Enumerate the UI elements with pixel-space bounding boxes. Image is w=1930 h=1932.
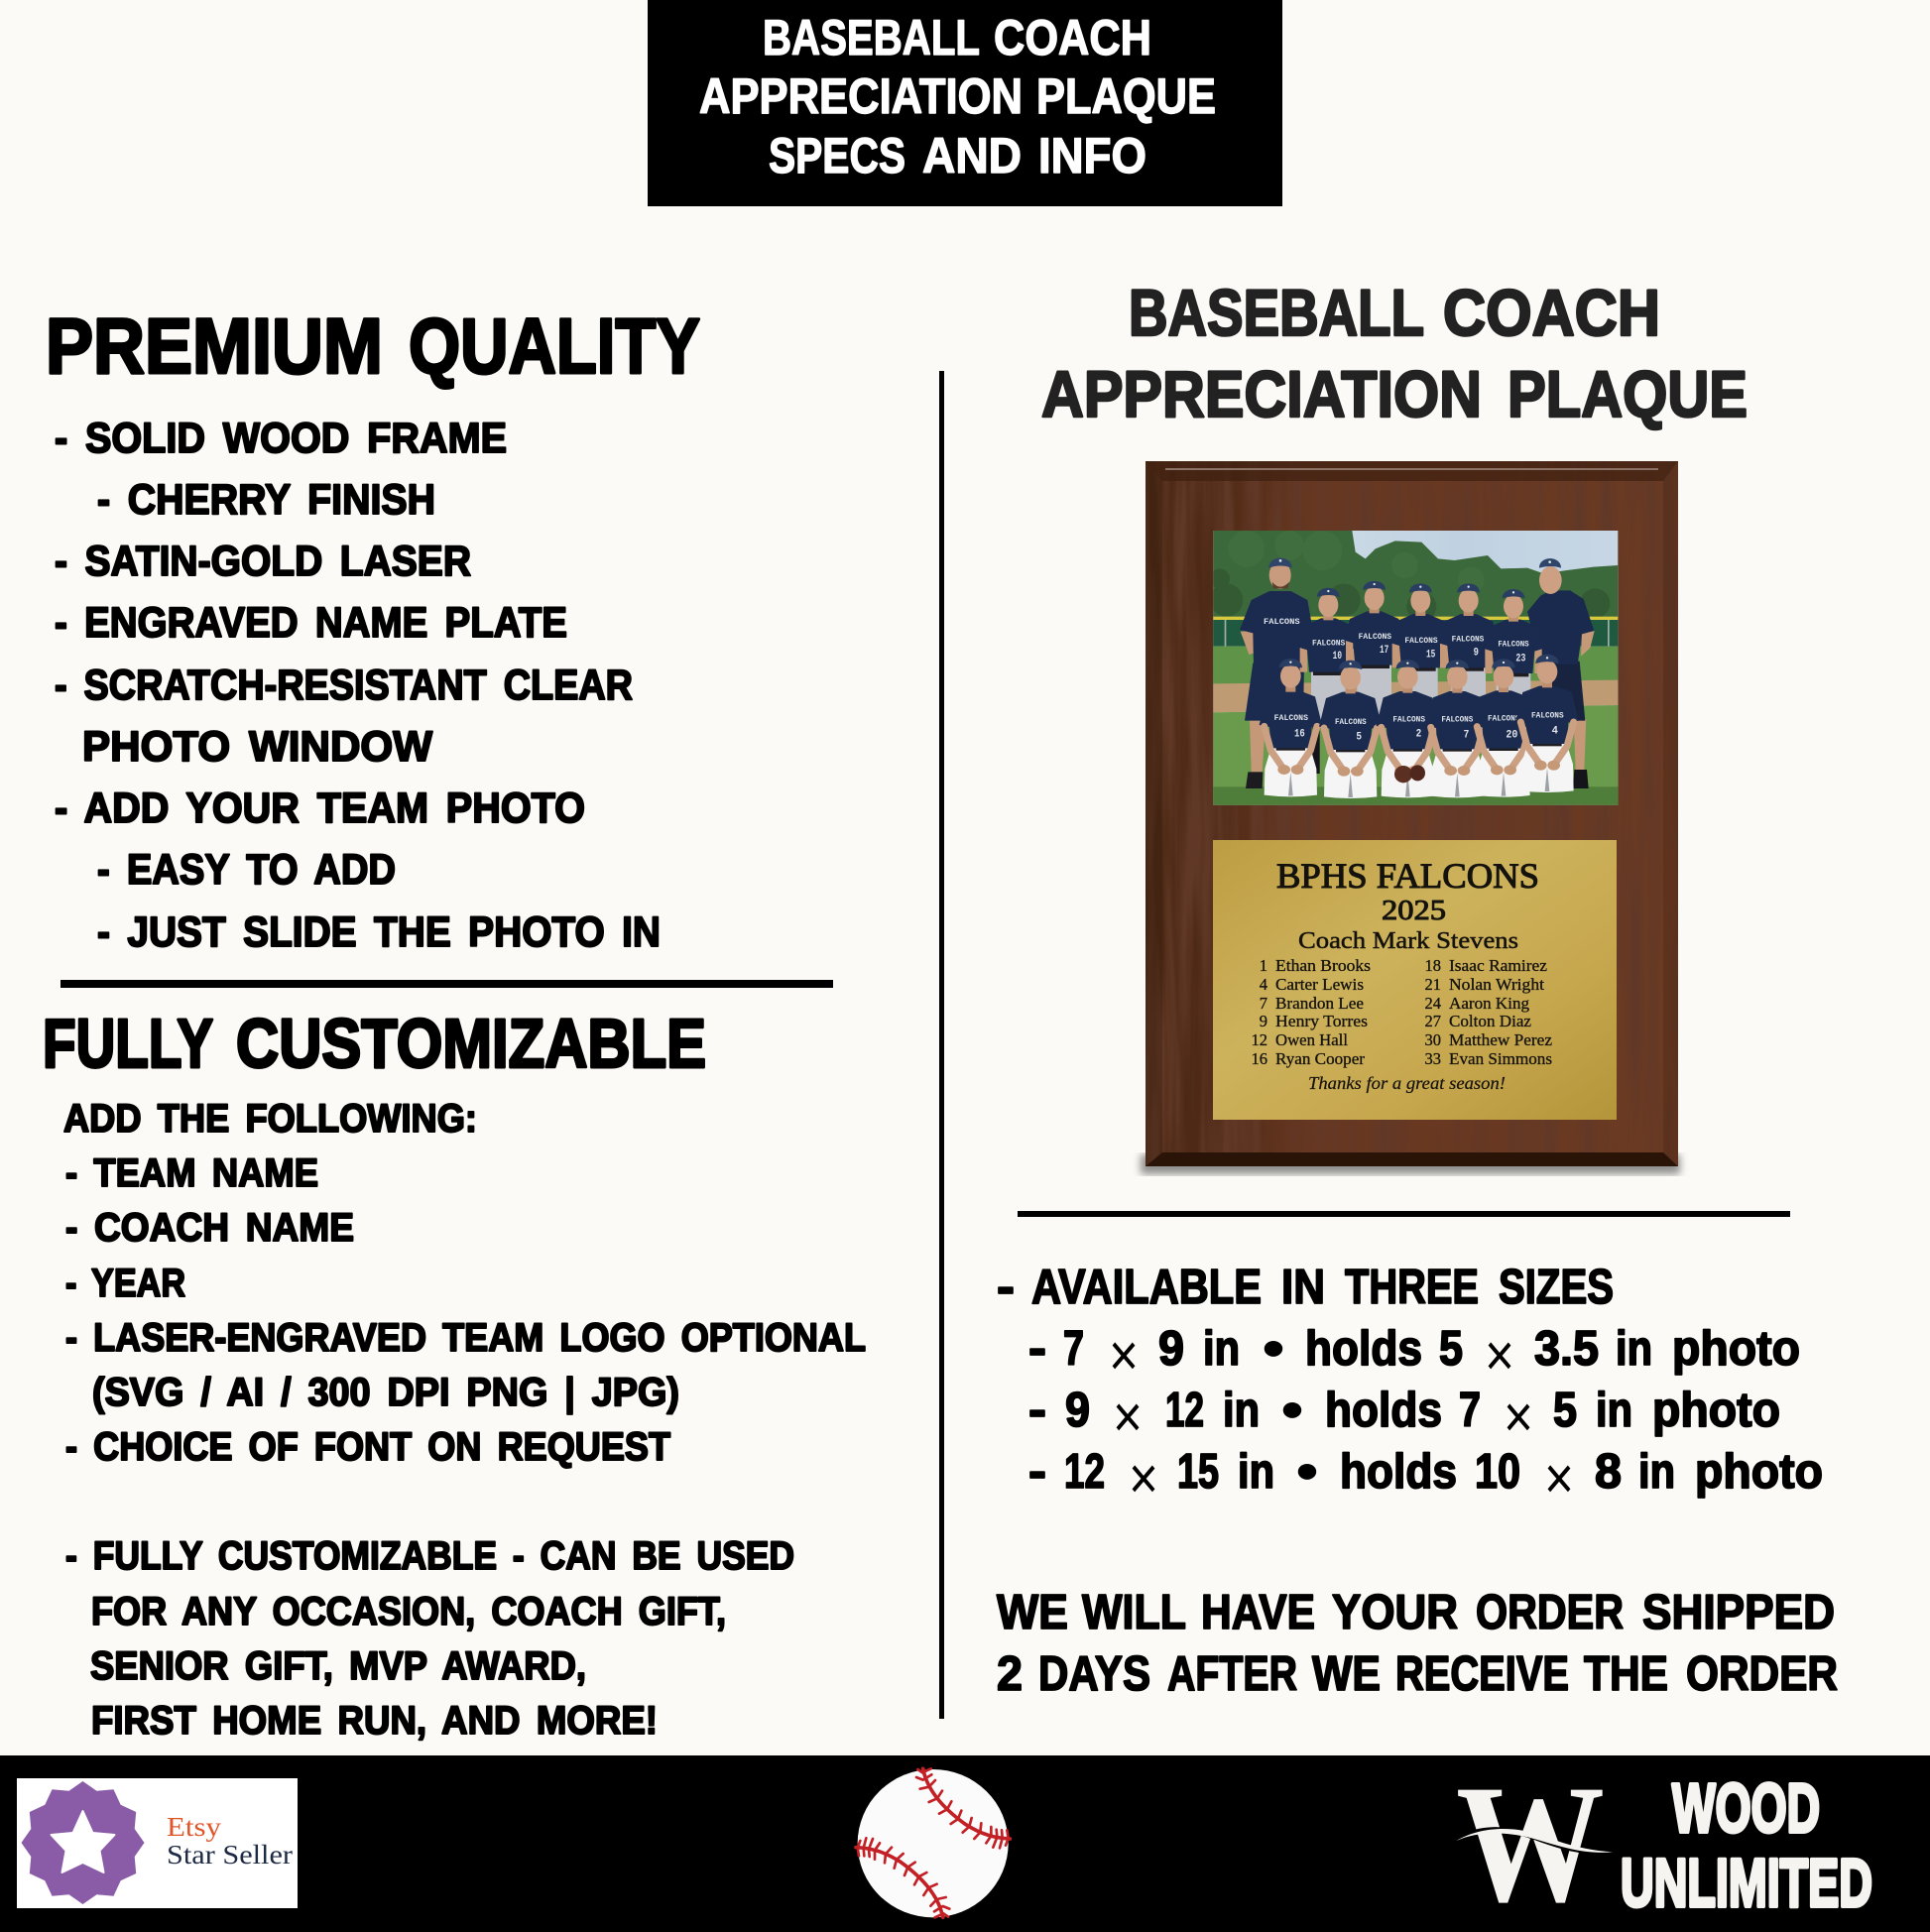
panel: sizes: • (1264, 1322, 1283, 1376)
shipping note: RECEIVE (1395, 1647, 1569, 1701)
panel: fully customizable: ADD THE FOLLOWING: (63, 1097, 477, 1141)
title banner (648, 0, 1282, 206)
icon: baseball (856, 1768, 1010, 1917)
panel: premium quality: - JUST SLIDE THE PHOTO IN (97, 908, 661, 956)
engraved gold name plate: Isaac Ramirez (1449, 956, 1547, 975)
engraved gold name plate: 16 (1252, 1049, 1267, 1068)
engraved gold name plate: 30 (1424, 1030, 1441, 1049)
panel: fully customizable: CUSTOMIZABLE (236, 1005, 706, 1082)
panel: sizes: in (1638, 1445, 1675, 1499)
etsy star seller badge (17, 1778, 298, 1908)
panel: sizes: 5 (1553, 1384, 1577, 1437)
panel: fully customizable: FIRST HOME RUN, AND MORE! (91, 1699, 658, 1743)
engraved gold name plate: Thanks for a great season! (1308, 1073, 1506, 1093)
panel: sizes: in (1238, 1445, 1274, 1499)
front row players: 16 (1294, 729, 1305, 741)
engraved gold name plate: 7 (1260, 994, 1267, 1013)
title banner: AND (922, 128, 1022, 183)
front row players: 7 (1464, 729, 1469, 741)
back row players: FALCONS (1359, 632, 1391, 642)
panel: fully customizable: FOR ANY OCCASION, COACH GIFT, (91, 1590, 726, 1633)
shipping note: HAVE (1201, 1586, 1315, 1639)
panel: sizes: 7 (1063, 1322, 1084, 1376)
panel: sizes: 9 (1065, 1384, 1090, 1437)
panel: sizes: AVAILABLE (1031, 1261, 1262, 1314)
front row players (1260, 655, 1579, 798)
engraved gold name plate: Nolan Wright (1449, 975, 1544, 994)
wood unlimited logo: WOOD (1672, 1769, 1820, 1847)
panel: fully customizable: - YEAR (65, 1262, 185, 1305)
panel: sizes: 5 (1439, 1322, 1463, 1376)
panel: sizes: 9 (1158, 1322, 1184, 1376)
panel: sizes: 12 (1165, 1384, 1204, 1437)
panel: fully customizable (43, 1005, 866, 1743)
title banner: BASEBALL (763, 10, 980, 65)
panel: sizes: × (1129, 1445, 1158, 1511)
front row players: FALCONS (1335, 717, 1367, 727)
panel: premium quality: - ENGRAVED NAME PLATE (55, 599, 567, 647)
shipping note: ORDER (1476, 1586, 1624, 1639)
panel: premium quality: PHOTO WINDOW (82, 723, 432, 771)
shipping note: WE (997, 1586, 1068, 1639)
etsy star seller badge: Star Seller (167, 1840, 293, 1870)
panel: premium quality: - SATIN-GOLD LASER (55, 538, 471, 585)
back row players: 17 (1380, 645, 1388, 657)
engraved gold name plate: Ethan Brooks (1275, 956, 1371, 975)
coach left: FALCONS (1264, 617, 1300, 627)
panel: sizes: - (1028, 1445, 1046, 1499)
engraved gold name plate: 1 (1260, 956, 1267, 975)
panel: sizes: • (1297, 1445, 1317, 1499)
panel: premium quality: - ADD YOUR TEAM PHOTO (55, 785, 585, 832)
shipping note: ORDER (1686, 1647, 1838, 1701)
panel: premium quality: PREMIUM (46, 302, 383, 390)
icon: purple star seal (22, 1781, 145, 1904)
panel: sizes: - (1028, 1322, 1046, 1376)
panel: sizes: 12 (1064, 1445, 1105, 1499)
icon: serif W with swoosh: W (1456, 1751, 1605, 1932)
front row players: 20 (1506, 729, 1517, 741)
panel: sizes: × (1485, 1322, 1514, 1389)
panel: sizes: 3.5 (1534, 1322, 1599, 1376)
panel: premium quality (46, 302, 700, 956)
panel: fully customizable: - FULLY CUSTOMIZABLE - CAN BE USED (65, 1534, 794, 1578)
panel: sizes: • (1282, 1384, 1302, 1437)
shipping note: WE (1312, 1647, 1381, 1701)
panel: premium quality: - CHERRY FINISH (97, 476, 435, 524)
panel: premium quality: QUALITY (409, 302, 700, 390)
panel: sizes: 8 (1595, 1445, 1622, 1499)
panel: sizes: in (1203, 1322, 1240, 1376)
wood unlimited logo (1456, 1751, 1872, 1932)
panel: sizes: THREE (1345, 1261, 1479, 1314)
engraved gold name plate: Ryan Cooper (1275, 1049, 1366, 1068)
panel: premium quality: - EASY TO ADD (97, 846, 396, 894)
panel: sizes: - (997, 1261, 1015, 1314)
back row players: FALCONS (1498, 640, 1529, 650)
etsy star seller badge: Etsy (167, 1812, 222, 1842)
back row players: 23 (1515, 654, 1525, 665)
engraved gold name plate: 4 (1260, 975, 1267, 994)
coach left (1240, 558, 1320, 788)
coach right (1527, 558, 1595, 788)
panel: sizes: × (1109, 1322, 1139, 1389)
back row players: 15 (1426, 650, 1435, 662)
panel: fully customizable: - CHOICE OF FONT ON REQUEST (65, 1425, 670, 1469)
panel: sizes: × (1504, 1384, 1533, 1450)
back row players: 10 (1333, 651, 1342, 663)
back row players: FALCONS (1404, 636, 1438, 646)
title banner: COACH (994, 10, 1151, 65)
back row players (1298, 581, 1543, 725)
back row players: FALCONS (1452, 634, 1484, 644)
footer bar (0, 1751, 1930, 1932)
engraved gold name plate: Carter Lewis (1275, 975, 1364, 994)
back row players: 9 (1474, 648, 1479, 660)
panel: sizes: in (1596, 1384, 1632, 1437)
shipping note: DAYS (1038, 1647, 1150, 1701)
engraved gold name plate: 24 (1424, 994, 1441, 1013)
panel: sizes: × (1113, 1384, 1143, 1450)
engraved gold name plate: Owen Hall (1275, 1030, 1348, 1049)
front row players: FALCONS (1392, 714, 1425, 724)
engraved gold name plate: BPHS FALCONS (1276, 856, 1539, 896)
engraved gold name plate: 18 (1424, 956, 1441, 975)
panel: fully customizable: SENIOR GIFT, MVP AWARD, (90, 1644, 586, 1688)
panel: fully customizable: (SVG / AI / 300 DPI PNG | JPG) (92, 1371, 679, 1414)
front row players: 4 (1552, 725, 1558, 737)
engraved gold name plate: Henry Torres (1275, 1012, 1368, 1030)
panel: premium quality: - SCRATCH-RESISTANT CLEAR (55, 662, 633, 709)
title banner: SPECS (769, 128, 905, 183)
panel: fully customizable: FULLY (43, 1005, 213, 1082)
panel: sizes: 10 (1475, 1445, 1520, 1499)
engraved gold name plate: 12 (1252, 1030, 1267, 1049)
front row players: FALCONS (1441, 714, 1473, 724)
engraved gold name plate: 21 (1424, 975, 1441, 994)
front row players: FALCONS (1274, 713, 1308, 723)
front row players: FALCONS (1488, 714, 1519, 724)
shipping note (997, 1586, 1838, 1701)
shipping note: THE (1584, 1647, 1668, 1701)
panel: sizes: photo (1695, 1445, 1823, 1499)
panel: premium quality: - SOLID WOOD FRAME (55, 415, 507, 462)
engraved gold name plate: 2025 (1382, 895, 1446, 926)
engraved gold name plate: Coach Mark Stevens (1298, 928, 1518, 954)
panel: fully customizable: - COACH NAME (65, 1206, 354, 1250)
panel: sizes: × (1544, 1445, 1574, 1511)
heading: plaque title: PLAQUE (1508, 357, 1748, 430)
back row players: FALCONS (1312, 639, 1345, 649)
plaque product (1141, 461, 1680, 1174)
shipping note: AFTER (1167, 1647, 1297, 1701)
front row players: 5 (1356, 731, 1362, 743)
shipping note: WILL (1082, 1586, 1186, 1639)
panel: sizes: photo (1672, 1322, 1800, 1376)
title banner: INFO (1038, 128, 1146, 183)
shipping note: YOUR (1332, 1586, 1458, 1639)
panel: sizes: in (1223, 1384, 1260, 1437)
engraved gold name plate: Colton Diaz (1449, 1012, 1531, 1030)
panel: sizes: in (1616, 1322, 1652, 1376)
engraved gold name plate: Brandon Lee (1275, 994, 1364, 1013)
engraved gold name plate: 33 (1424, 1049, 1441, 1068)
panel: sizes: holds (1340, 1445, 1457, 1499)
engraved gold name plate: 9 (1260, 1012, 1267, 1030)
engraved gold name plate: Matthew Perez (1449, 1030, 1552, 1049)
panel: sizes: - (1028, 1384, 1046, 1437)
front row players: FALCONS (1531, 711, 1564, 721)
title banner: PLAQUE (1036, 68, 1216, 124)
panel: sizes: 15 (1177, 1445, 1219, 1499)
team photo (1210, 531, 1618, 805)
panel: sizes: IN (1281, 1261, 1325, 1314)
panel: fully customizable: - TEAM NAME (65, 1151, 318, 1195)
panel: sizes: 7 (1459, 1384, 1481, 1437)
panel: sizes: holds (1305, 1322, 1422, 1376)
engraved gold name plate: Aaron King (1449, 994, 1529, 1013)
panel: sizes (997, 1261, 1823, 1511)
heading: plaque title: APPRECIATION (1041, 357, 1482, 430)
panel: sizes: photo (1652, 1384, 1780, 1437)
heading: plaque title: BASEBALL (1129, 276, 1424, 349)
shipping note: SHIPPED (1642, 1586, 1835, 1639)
panel: sizes: SIZES (1499, 1261, 1614, 1314)
panel: sizes: holds (1325, 1384, 1442, 1437)
engraved gold name plate: Evan Simmons (1449, 1049, 1552, 1068)
heading: plaque title (1041, 276, 1748, 430)
panel: fully customizable: - LASER-ENGRAVED TEAM LOGO OPTIONAL (65, 1316, 866, 1360)
engraved gold name plate: 27 (1424, 1012, 1441, 1030)
shipping note: 2 (997, 1647, 1023, 1701)
title banner: APPRECIATION (699, 68, 1023, 124)
front row players: 2 (1416, 729, 1421, 741)
engraved gold name plate (1213, 840, 1617, 1120)
heading: plaque title: COACH (1443, 276, 1660, 349)
